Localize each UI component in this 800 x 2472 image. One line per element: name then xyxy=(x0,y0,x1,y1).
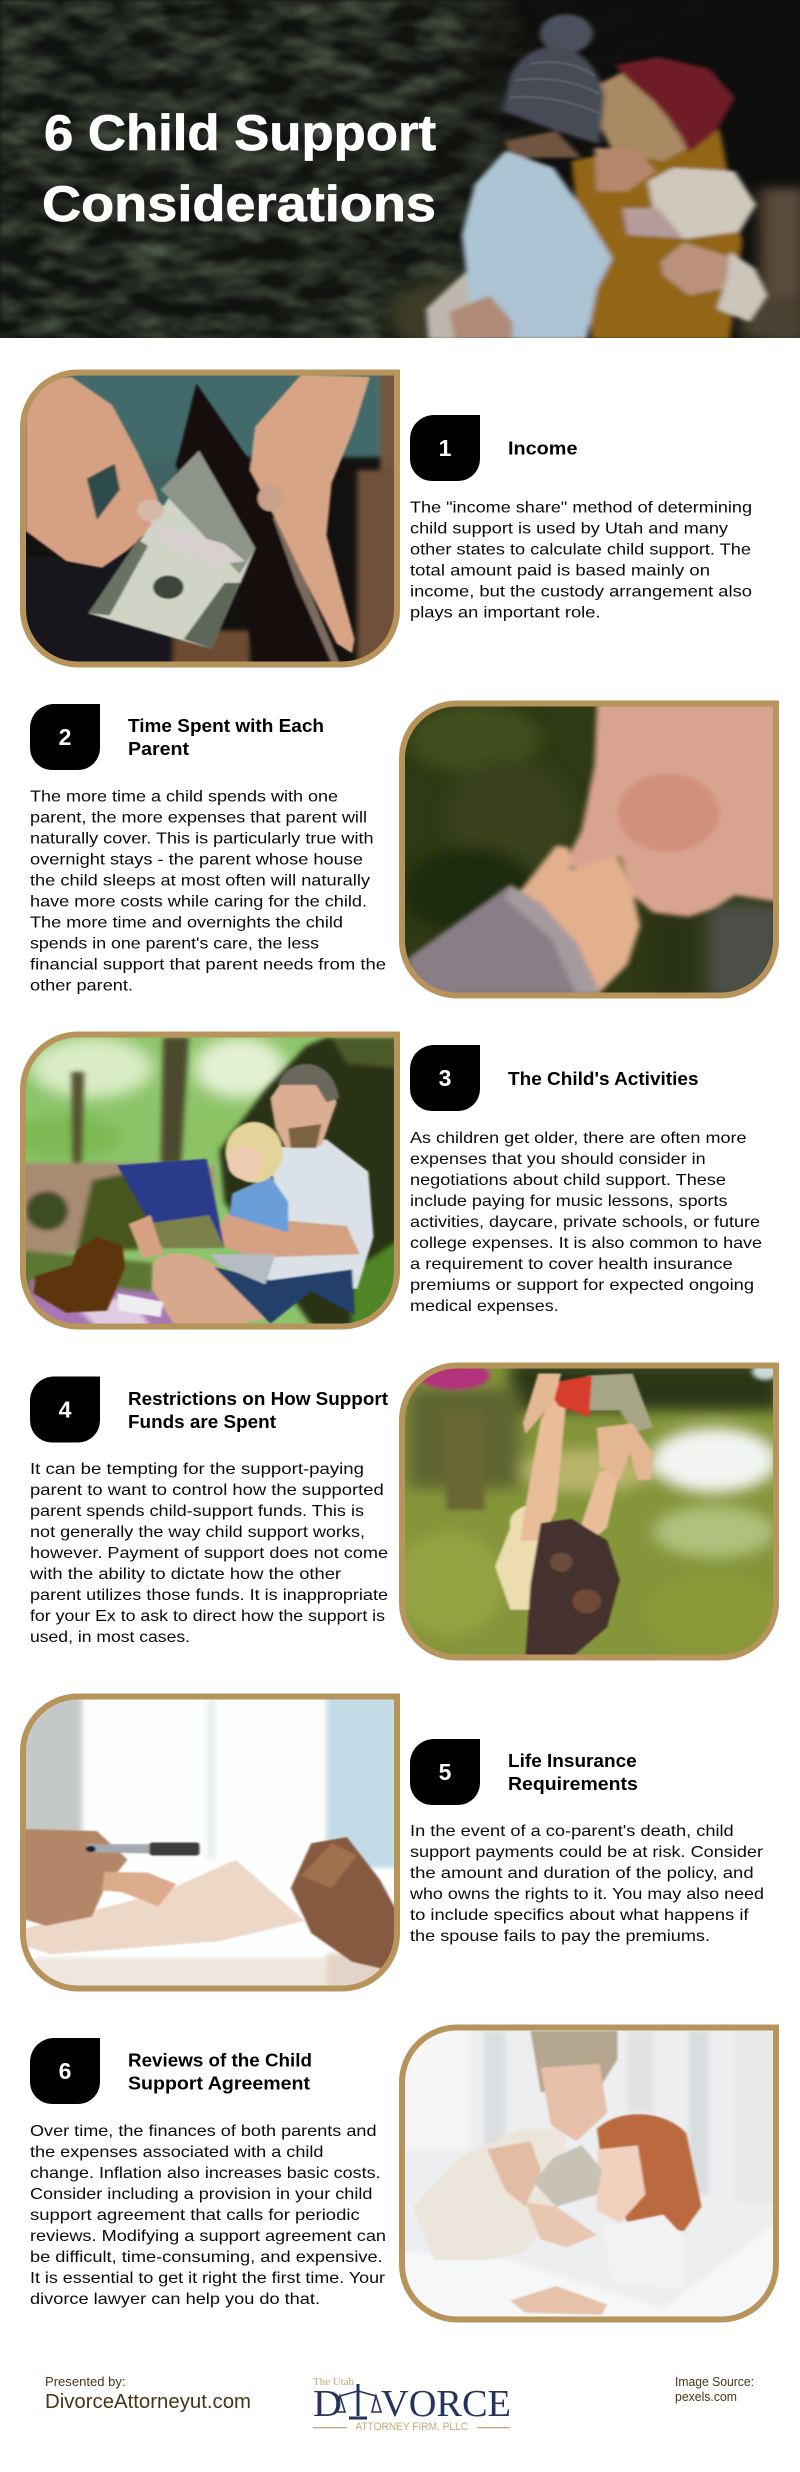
body text 5: In the event of a co-parent's death, child xyxy=(410,1823,734,1840)
number badge 4: 4 xyxy=(59,1396,72,1422)
body text 3: a requirement to cover health insurance xyxy=(410,1256,733,1273)
section 5: life insurance xyxy=(15,1688,764,1994)
heading 6: Support Agreement xyxy=(128,2074,310,2094)
body text 6 xyxy=(30,2123,386,2308)
body text 2: the child sleeps at most often will naturally xyxy=(30,872,370,890)
image source: pexels.com xyxy=(675,2389,737,2404)
heading 6 xyxy=(128,2050,312,2094)
body text 6: divorce lawyer can help you do that. xyxy=(30,2291,320,2308)
body text 4: with the ability to dictate how the other xyxy=(29,1566,342,1583)
body text 6: be difficult, time-consuming, and expensive. xyxy=(30,2249,383,2266)
body text 5: support payments could be at risk. Consider xyxy=(410,1844,764,1861)
body text 2: The more time and overnights the child xyxy=(30,914,343,932)
body text 6: support agreement that calls for periodic xyxy=(30,2207,360,2224)
body text 5 xyxy=(409,1823,764,1945)
photo frame: mother helping girl drink from mug xyxy=(398,2023,786,2325)
section 6: reviews xyxy=(30,2023,786,2325)
body text 6: Over time, the finances of both parents and xyxy=(30,2123,376,2140)
logo: The Utah Divorce Attorney Firm: VORCE xyxy=(381,2383,511,2425)
heading 6: Reviews of the Child xyxy=(128,2050,312,2070)
body text 6: reviews. Modifying a support agreement can xyxy=(30,2228,386,2245)
body text 4: parent spends child-support funds. This is xyxy=(30,1503,364,1520)
number badge 3 xyxy=(410,1045,480,1111)
icon: scales of justice xyxy=(336,2384,381,2418)
photo frame: father reading with child xyxy=(10,1029,408,1332)
body text 2: parent, the more expenses that parent will xyxy=(30,810,367,826)
body text 4: not generally the way child support works, xyxy=(30,1524,365,1541)
number badge 1: 1 xyxy=(439,435,452,461)
body text 4: used, in most cases. xyxy=(30,1629,190,1646)
body text 4: however. Payment of support does not come xyxy=(30,1545,388,1562)
body text 3: negotiations about child support. These xyxy=(410,1172,726,1189)
body text 2: have more costs while caring for the child. xyxy=(30,894,367,910)
body text 1: plays an important role. xyxy=(410,604,600,622)
photo frame: mother lifting child in meadow xyxy=(393,1358,786,1666)
body text 1: The "income share" method of determining xyxy=(410,500,752,516)
body text 3 xyxy=(410,1130,762,1315)
presented by: DivorceAttorneyut.com xyxy=(45,2391,251,2413)
logo: The Utah Divorce Attorney Firm: D xyxy=(313,2383,342,2425)
number badge 6: 6 xyxy=(59,2058,71,2084)
body text 3: college expenses. It is also common to have xyxy=(410,1235,762,1252)
presented by: Presented by: xyxy=(45,2374,126,2389)
title: 6 Child Support xyxy=(44,105,436,161)
body text 4: It can be tempting for the support-paying xyxy=(30,1461,364,1478)
photo frame: signing a document with pen xyxy=(15,1688,408,1994)
body text 4 xyxy=(29,1461,388,1646)
body text 2: financial support that parent needs from the xyxy=(30,956,386,974)
section 3: activities xyxy=(10,1029,762,1332)
body text 1 xyxy=(410,500,752,622)
body text 2: naturally cover. This is particularly true with xyxy=(30,830,374,848)
body text 5: to include specifics about what happens if xyxy=(410,1907,749,1924)
body text 5: the amount and duration of the policy, and xyxy=(410,1865,754,1882)
hero banner xyxy=(0,0,800,352)
heading 4: Funds are Spent xyxy=(128,1412,276,1432)
logo: The Utah Divorce Attorney Firm: ATTORNEY FIRM, PLLC xyxy=(356,2421,468,2433)
number badge 5: 5 xyxy=(439,1759,452,1785)
section 4: restrictions xyxy=(29,1358,786,1666)
body text 5: who owns the rights to it. You may also need xyxy=(409,1886,764,1903)
logo: The Utah Divorce Attorney Firm: The Utah xyxy=(313,2376,354,2388)
body text 1: income, but the custody arrangement also xyxy=(410,584,752,600)
body text 1: other states to calculate child support. The xyxy=(410,542,751,558)
heading 5: Requirements xyxy=(508,1774,638,1794)
image source: Image Source: xyxy=(675,2374,754,2389)
hero photo: mother with two children xyxy=(0,0,800,352)
body text 3: As children get older, there are often more xyxy=(410,1130,747,1147)
body text 4: parent to want to control how the supported xyxy=(30,1482,384,1499)
section 2: time spent xyxy=(30,700,786,1004)
number badge 2 xyxy=(30,704,100,770)
number badge 1 xyxy=(410,415,480,481)
number badge 2: 2 xyxy=(59,724,71,750)
number badge 3: 3 xyxy=(439,1065,451,1091)
body text 2 xyxy=(30,788,386,994)
body text 2: The more time a child spends with one xyxy=(30,788,338,806)
body text 1: total amount paid is based mainly on xyxy=(410,562,710,580)
heading 5 xyxy=(508,1751,638,1794)
number badge 5 xyxy=(410,1739,480,1805)
body text 3: include paying for music lessons, sports xyxy=(410,1193,728,1210)
body text 4: for your Ex to ask to direct how the support is xyxy=(30,1608,385,1625)
body text 6: It is essential to get it right the first time. Your xyxy=(30,2270,386,2287)
body text 6: the expenses associated with a child xyxy=(30,2144,324,2161)
body text 1: child support is used by Utah and many xyxy=(410,520,728,538)
body text 6: Consider including a provision in your child xyxy=(30,2186,372,2203)
body text 4: parent utilizes those funds. It is inappropriate xyxy=(30,1587,388,1604)
heading 2 xyxy=(128,716,324,759)
body text 2: other parent. xyxy=(30,978,133,994)
body text 3: medical expenses. xyxy=(410,1298,559,1315)
logo: The Utah Divorce Attorney Firm xyxy=(313,2376,511,2433)
body text 2: overnight stays - the parent whose house xyxy=(30,852,363,868)
heading 1: Income xyxy=(508,438,578,458)
presented by xyxy=(45,2374,251,2413)
title xyxy=(44,113,436,222)
number badge 4 xyxy=(30,1376,100,1442)
heading 4: Restrictions on How Support xyxy=(128,1389,388,1409)
heading 2: Parent xyxy=(128,739,189,759)
title: Considerations xyxy=(42,176,436,232)
section 1: income xyxy=(15,366,752,670)
photo frame: baby holding adult hand xyxy=(398,700,786,1004)
heading 5: Life Insurance xyxy=(508,1751,637,1771)
body text 6: change. Inflation also increases basic costs. xyxy=(30,2165,381,2182)
heading 3: The Child's Activities xyxy=(508,1069,698,1089)
image source xyxy=(675,2374,754,2404)
number badge 6 xyxy=(30,2038,100,2104)
body text 5: the spouse fails to pay the premiums. xyxy=(410,1928,710,1945)
body text 2: spends in one parent's care, the less xyxy=(30,936,319,952)
heading 2: Time Spent with Each xyxy=(128,716,324,736)
body text 3: premiums or support for expected ongoing xyxy=(410,1277,754,1294)
heading 4 xyxy=(128,1389,388,1432)
photo frame: hands with wallet and five dollar bill xyxy=(15,366,408,670)
footer xyxy=(45,2374,754,2433)
body text 3: expenses that you should consider in xyxy=(410,1151,706,1168)
body text 3: activities, daycare, private schools, or future xyxy=(410,1214,760,1231)
